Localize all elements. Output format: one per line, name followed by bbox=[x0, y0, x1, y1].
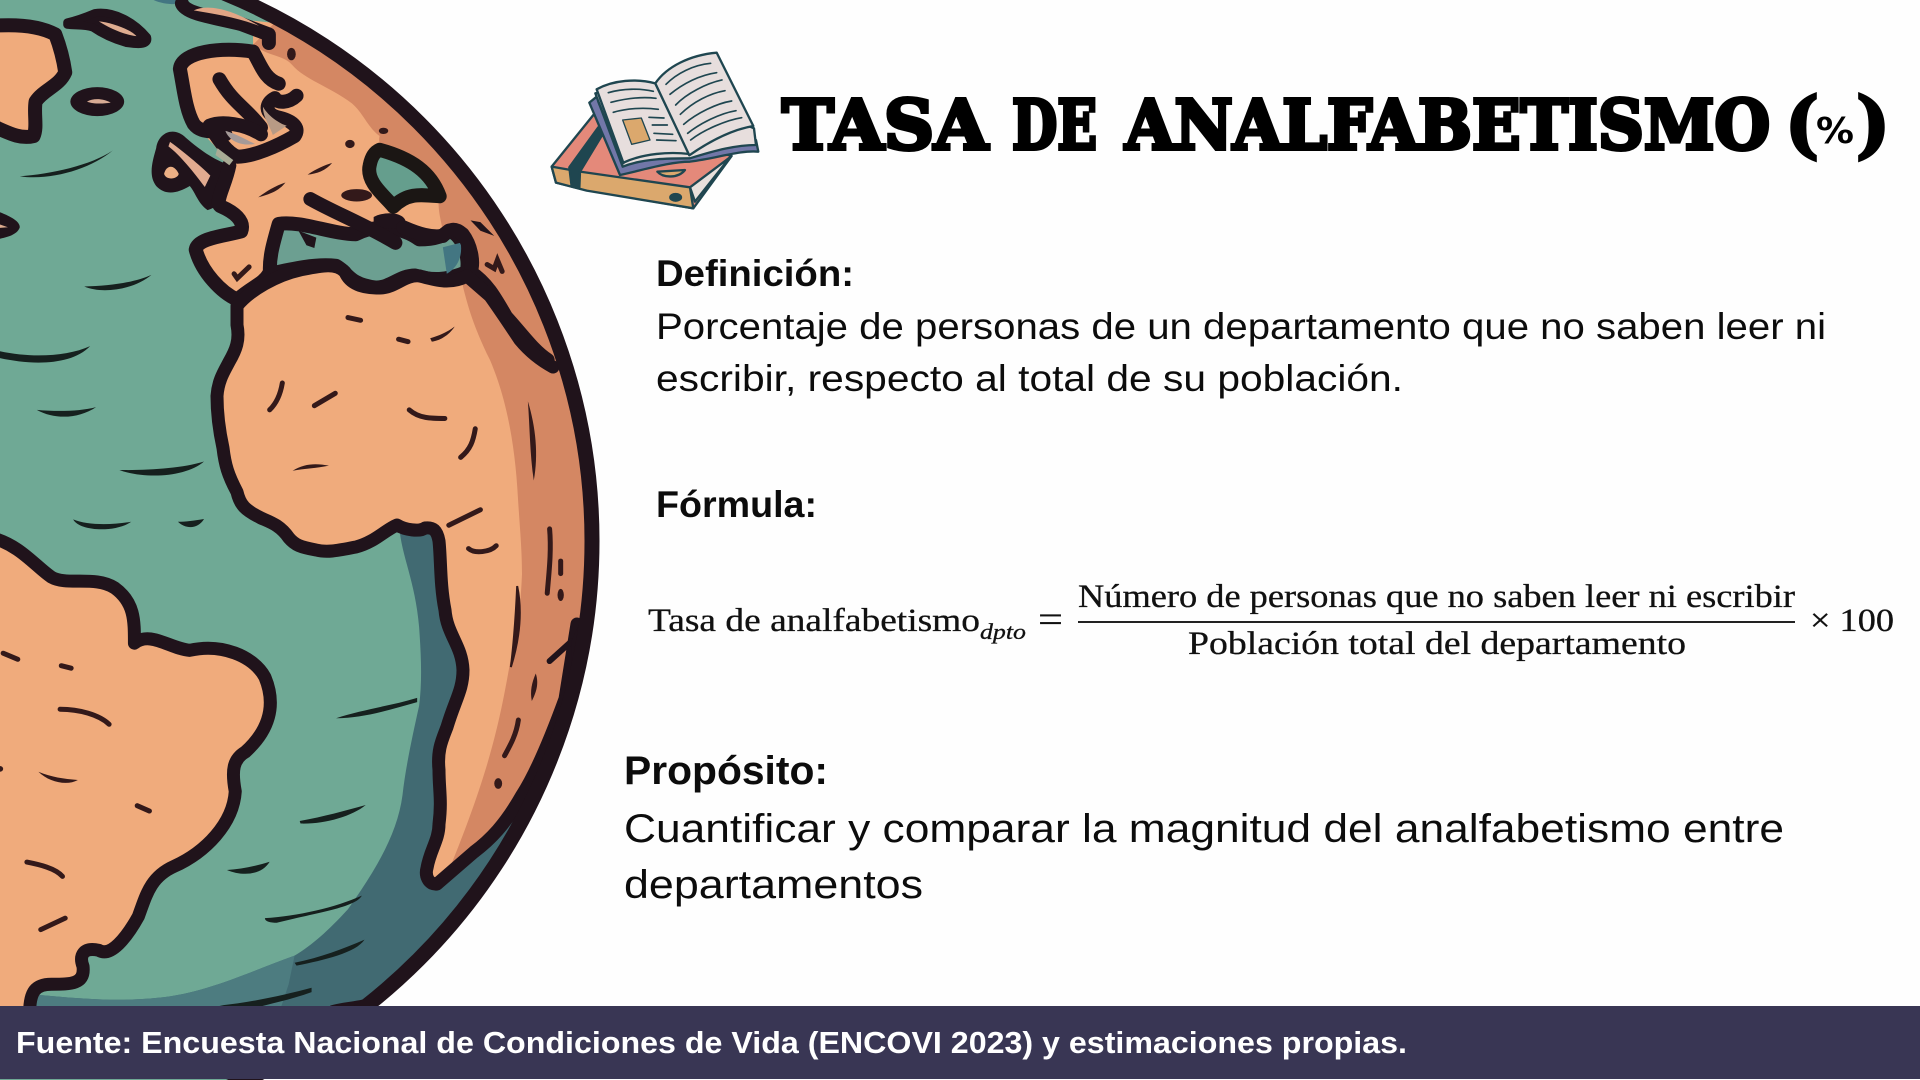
formula: × 100 bbox=[1810, 603, 1894, 639]
globe illustration bbox=[0, 0, 620, 1080]
formula heading: Fórmula: bbox=[656, 484, 817, 525]
Mediterranean bbox=[270, 223, 468, 288]
footer source bar: Fuente: Encuesta Nacional de Condiciones de Vida (ENCOVI 2023) y estimaciones propias. bbox=[16, 1025, 1407, 1060]
title bbox=[782, 81, 1890, 166]
title: ANALFABETISMO bbox=[1124, 86, 1770, 166]
definition block bbox=[656, 253, 1826, 399]
globe outline bbox=[0, 0, 592, 1080]
ocean bbox=[0, 0, 422, 1080]
right page bbox=[655, 53, 753, 155]
text lines bbox=[608, 63, 742, 141]
South America landmass bbox=[0, 538, 270, 1013]
title: ( bbox=[1785, 81, 1819, 166]
ocean shadow bbox=[36, 534, 512, 1006]
inland sea bbox=[369, 150, 440, 207]
closed book bbox=[552, 115, 732, 208]
title: % bbox=[1816, 111, 1854, 152]
formula: Tasa de analfabetismo bbox=[648, 603, 980, 639]
page block bbox=[595, 87, 756, 167]
title: ) bbox=[1856, 81, 1890, 166]
formula: Número de personas que no saben leer ni escribir bbox=[1078, 579, 1795, 615]
formula: dpto bbox=[980, 619, 1026, 644]
purpose block: Propósito: bbox=[624, 749, 828, 793]
purpose block: Cuantificar y comparar la magnitud del analfabetismo entre bbox=[624, 807, 1784, 851]
ocean wave marks bbox=[0, 0, 204, 529]
definition block: Porcentaje de personas de un departamento que no saben leer ni bbox=[656, 306, 1826, 347]
Europe and Asia landmass bbox=[180, 3, 573, 379]
purpose block bbox=[624, 749, 1784, 907]
definition block: Definición: bbox=[656, 253, 854, 294]
footer source bar bbox=[0, 1006, 1920, 1079]
purpose block: departamentos bbox=[624, 863, 923, 907]
Africa landmass bbox=[217, 266, 620, 884]
formula: = bbox=[1038, 599, 1063, 641]
picture on page bbox=[623, 118, 650, 144]
land marks bbox=[287, 48, 296, 60]
icon: stack of books bbox=[552, 53, 758, 208]
title: DE bbox=[1012, 86, 1097, 166]
coast lines bbox=[180, 50, 253, 134]
formula: Población total del departamento bbox=[1188, 626, 1686, 662]
left page bbox=[597, 81, 689, 163]
northern islands bbox=[0, 13, 232, 239]
formula bbox=[648, 579, 1894, 662]
title: TASA bbox=[782, 86, 989, 166]
open book cover bbox=[589, 97, 758, 175]
definition block: escribir, respecto al total de su población. bbox=[656, 358, 1403, 399]
